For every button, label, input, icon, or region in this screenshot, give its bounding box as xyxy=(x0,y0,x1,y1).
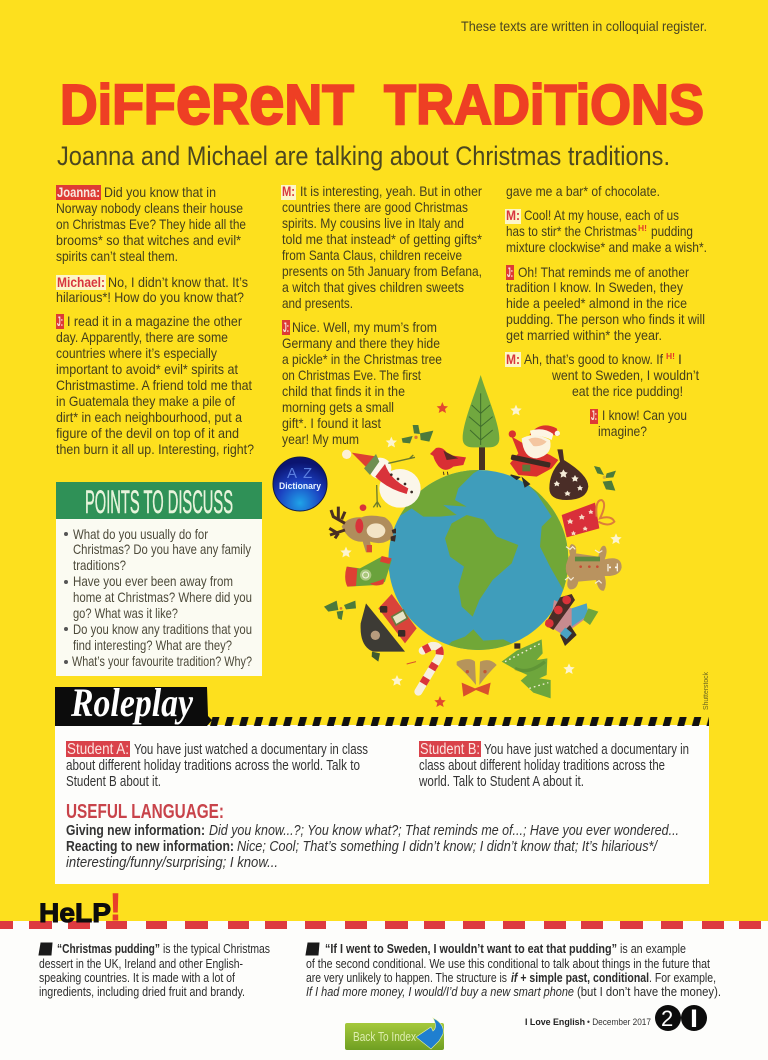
stars xyxy=(340,402,622,707)
dialogue column 1: Did you know that in xyxy=(104,184,216,200)
dialogue column 2: a pickle* in the Christmas tree xyxy=(282,351,442,367)
illustration: globe with Christmas icons xyxy=(324,375,622,707)
dialogue column 3: J: xyxy=(591,407,597,423)
useful language: Reacting to new information: xyxy=(66,839,234,855)
dialogue column 3: H! xyxy=(638,224,647,233)
icon: bells with bow xyxy=(457,659,497,697)
dialogue column 1: then burn it all up. Interesting, right? xyxy=(56,441,254,457)
note: Christmas pudding xyxy=(39,941,270,999)
dialogue column 3: Cool! At my house, each of us xyxy=(524,207,679,223)
note: second conditional xyxy=(306,941,721,999)
dialogue column 2: spirits. My cousins live in Italy and xyxy=(282,215,464,231)
icon: globe xyxy=(388,470,568,650)
dialogue column 2: on Christmas Eve. The first xyxy=(282,367,421,383)
footer: magazine and date xyxy=(525,1017,651,1028)
icon: holly upper left xyxy=(402,425,433,443)
heading: roleplay tab: Roleplay xyxy=(70,680,193,725)
discussion questions: Have you ever been away from xyxy=(73,573,233,589)
discussion questions: home at Christmas? Where did you xyxy=(73,589,252,605)
dialogue column 3: H! xyxy=(666,352,675,361)
dialogue column 2: It is interesting, yeah. But in other xyxy=(300,183,482,199)
heading: help: HeLP xyxy=(39,898,111,928)
heading: help: ! xyxy=(110,887,121,929)
student A: You have just watched a documentary in class xyxy=(134,742,368,758)
dialogue column 2: countries there are good Christmas xyxy=(282,199,468,215)
dialogue column 3: J: xyxy=(507,264,513,280)
note: second conditional: . For example, xyxy=(649,970,716,985)
note: Christmas pudding: ingredients, including dried fruit and brandy. xyxy=(39,984,245,999)
discussion questions: What do you usually do for xyxy=(73,526,208,542)
icon: Santa Claus xyxy=(509,425,560,487)
dialogue column 3: went to Sweden, I wouldn’t xyxy=(551,367,699,383)
note: second conditional: If I had more money, I would/I’d buy a new smart phone xyxy=(306,984,574,999)
dialogue column 1: countries where it’s especially xyxy=(56,345,217,361)
dialogue column 2: J: xyxy=(283,319,289,335)
discussion questions xyxy=(64,526,252,669)
dialogue column 2: child that finds it in the xyxy=(282,383,405,399)
icon: gift sack xyxy=(549,449,588,500)
dialogue column 3: mixture clockwise* and make a wish*. xyxy=(506,239,707,255)
icon: gift box xyxy=(562,500,614,537)
dialogue column 3: M: xyxy=(506,207,520,223)
dialogue column 3: hide a peeled* almond in the rice xyxy=(506,295,687,311)
dialogue column 3: eat the rice pudding! xyxy=(572,383,683,399)
dialogue column 3: I know! Can you xyxy=(602,407,687,423)
dialogue column 1: No, I didn’t know that. It’s xyxy=(108,274,248,290)
dialogue column 1: I read it in a magazine the other xyxy=(67,313,242,329)
dialogue column 2: gift*. I found it last xyxy=(282,415,381,431)
dialogue column 3: imagine? xyxy=(598,423,647,439)
dialogue column 3: Oh! That reminds me of another xyxy=(518,264,689,280)
dialogue column 1: day. Apparently, there are some xyxy=(56,329,228,345)
dialogue column 3: has to stir* the Christmas xyxy=(506,223,637,239)
panel: points to discuss xyxy=(56,482,262,676)
title: DiFFeReNT xyxy=(60,61,354,139)
note: Christmas pudding: speaking countries. It is made with a lot of xyxy=(39,970,235,985)
icon: dictionary button: A xyxy=(287,465,297,482)
dialogue column 1: spirits can’t steal them. xyxy=(56,248,178,264)
dialogue column 3: get married within* the year. xyxy=(506,327,662,343)
dialogue column 2: presents on 5th January from Befana, xyxy=(282,263,482,279)
button: back to index xyxy=(345,1018,444,1050)
discussion questions: What’s your favourite tradition? Why? xyxy=(72,653,252,669)
page number: 2 xyxy=(661,1006,673,1031)
dialogue column 3: tradition I know. In Sweden, they xyxy=(506,279,683,295)
page number: I xyxy=(690,1005,698,1033)
dialogue column 1: Joanna: xyxy=(57,184,100,200)
help band xyxy=(0,921,768,1060)
discussion questions: Christmas? Do you have any family xyxy=(73,541,251,557)
button: back to index: Back To Index xyxy=(353,1029,416,1044)
dialogue column 1: Norway nobody cleans their house xyxy=(56,200,243,216)
icon: holly top right xyxy=(594,466,616,491)
icon: book xyxy=(306,943,319,955)
useful language: Giving new information: xyxy=(66,823,205,839)
note: Christmas pudding: dessert in the UK, Ireland and other English- xyxy=(39,956,243,971)
student A: Student B about it. xyxy=(66,774,161,790)
student A: Student A: xyxy=(67,741,129,758)
useful language: interesting/funny/surprising; I know... xyxy=(66,855,278,871)
discussion questions: go? What was it like? xyxy=(73,605,178,621)
student A: about different holiday traditions across the world. Talk to xyxy=(66,758,360,774)
icon: holly lower left xyxy=(324,601,356,620)
note: second conditional: if + simple past, conditional xyxy=(511,970,649,985)
subtitle: Joanna and Michael are talking about Christmas traditions. xyxy=(57,141,670,171)
icon: dictionary button xyxy=(273,457,327,511)
useful language: USEFUL LANGUAGE: xyxy=(66,801,224,823)
dialogue column 1: important to avoid* evil* spirits at xyxy=(56,361,238,377)
dialogue column 2: morning gets a small xyxy=(282,399,394,415)
dialogue column 1: J: xyxy=(57,313,63,329)
heading: help xyxy=(39,887,121,929)
student B: Student B: xyxy=(420,741,480,758)
discussion questions: find interesting? What are they? xyxy=(73,637,232,653)
icon: red bird xyxy=(430,448,466,475)
dialogue column 1: in Guatemala they make a pile of xyxy=(56,393,235,409)
dialogue column 3: M: xyxy=(506,351,520,367)
dialogue column 3: pudding. The person who finds it will xyxy=(506,311,705,327)
red dashed divider xyxy=(0,921,761,929)
icon: house xyxy=(361,594,417,662)
dialogue column 2: a witch that gives children sweets xyxy=(282,279,464,295)
dialogue column 1: Christmastime. A friend told me that xyxy=(56,377,252,393)
icon: snowman xyxy=(342,450,421,508)
dialogue column 3: gave me a bar* of chocolate. xyxy=(506,183,660,199)
icon: dictionary button: Z xyxy=(303,465,312,482)
title: TRADiTiONS xyxy=(384,73,704,137)
student B: You have just watched a documentary in xyxy=(484,742,689,758)
dialogue column 3: pudding xyxy=(651,223,693,239)
dialogue column 2: year! My mum xyxy=(282,431,359,447)
title xyxy=(60,61,704,139)
top note: These texts are written in colloquial register. xyxy=(461,18,707,34)
student A xyxy=(66,741,368,790)
note: second conditional: “If I went to Sweden, I wouldn’t want to eat that pudding” xyxy=(325,941,617,956)
dialogue column 1: brooms* so that witches and evil* xyxy=(56,232,241,248)
icon: book xyxy=(39,943,52,955)
icon: pine tree xyxy=(463,375,499,470)
note: Christmas pudding: “Christmas pudding” xyxy=(57,941,160,956)
note: Christmas pudding: is the typical Christmas xyxy=(163,941,270,956)
dialogue column 2: and presents. xyxy=(282,295,353,311)
footer: magazine and date: I Love English xyxy=(525,1017,585,1028)
icon: reindeer xyxy=(329,504,396,552)
student B: class about different holiday traditions across the xyxy=(419,758,665,774)
page number xyxy=(655,1005,707,1033)
heading: points to discuss xyxy=(56,482,262,520)
dialogue column 3: I xyxy=(678,351,682,367)
discussion questions: traditions? xyxy=(73,557,126,573)
panel: roleplay xyxy=(55,680,709,884)
useful language: Did you know...?; You know what?; That reminds me of...; Have you ever wondered... xyxy=(209,823,679,839)
dialogue column 2: Nice. Well, my mum’s from xyxy=(292,319,437,335)
footer: magazine and date: • December 2017 xyxy=(587,1017,651,1027)
student B xyxy=(418,741,689,790)
dialogue column 1: on Christmas Eve? They hide all the xyxy=(56,216,246,232)
dialogue column 2 xyxy=(281,183,482,447)
note: second conditional: are very unlikely to happen. The structure is xyxy=(306,970,507,985)
heading: points to discuss: POINTS TO DISCUSS xyxy=(85,484,233,520)
icon: blue arrow xyxy=(416,1018,443,1049)
dialogue column 2: M: xyxy=(282,183,295,199)
icon: gingerbread man xyxy=(565,544,622,591)
note: second conditional: (but I don’t have the money). xyxy=(577,984,721,999)
discussion questions: Do you know any traditions that you xyxy=(73,621,252,637)
dialogue column 3 xyxy=(505,183,707,439)
dialogue column 1: Michael: xyxy=(57,274,105,290)
dialogue column 2: from Santa Claus, children receive xyxy=(282,247,462,263)
icon: small fir tree xyxy=(502,639,551,698)
icon: stocking xyxy=(345,556,392,587)
note: second conditional: is an example xyxy=(620,941,686,956)
student B: world. Talk to Student A about it. xyxy=(418,774,584,790)
icon: dictionary button: Dictionary xyxy=(279,481,322,492)
dialogue column 1: dirt* in each neighbourhood, put a xyxy=(56,409,242,425)
dialogue column 1: hilarious*! How do you know that? xyxy=(56,289,244,305)
useful language xyxy=(66,801,679,871)
dialogue column 3: Ah, that’s good to know. If xyxy=(524,351,663,367)
dialogue column 1: figure of the devil on top of it and xyxy=(56,425,239,441)
credit: Shutterstock: Shutterstock xyxy=(703,672,710,710)
icon: toy train xyxy=(545,594,598,646)
dialogue column 2: told me that instead* of getting gifts* xyxy=(282,231,482,247)
useful language: Nice; Cool; That’s something I didn’t know; I didn’t know that; It’s hilarious*/ xyxy=(237,839,659,855)
dialogue column 1 xyxy=(56,184,254,457)
dialogue column 2: Germany and there they hide xyxy=(282,335,440,351)
icon: candy cane xyxy=(407,646,440,692)
